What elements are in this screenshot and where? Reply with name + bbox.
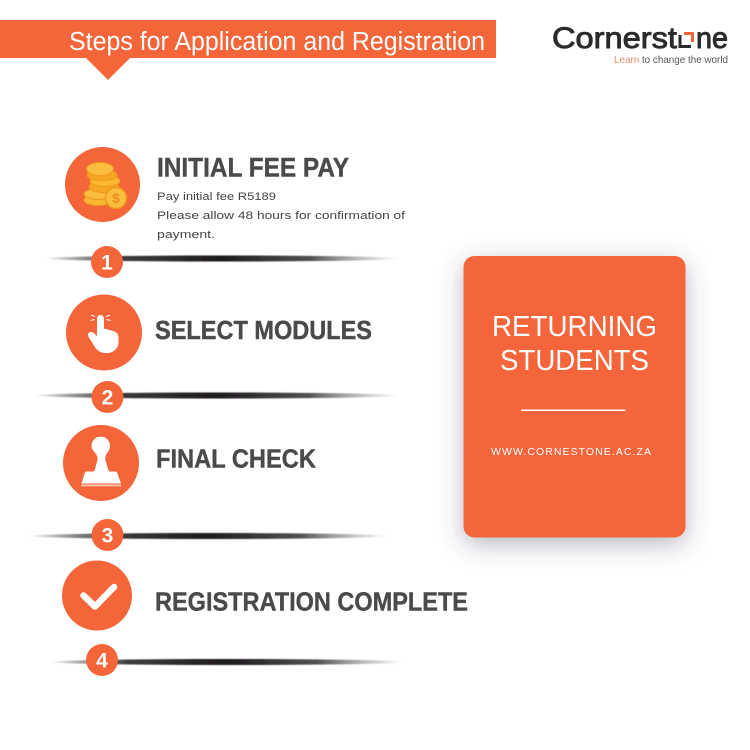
icon: gold coins	[65, 147, 140, 222]
divider with number 2: 2	[102, 386, 113, 410]
title banner: Steps for Application and Registration	[69, 28, 485, 56]
heading: FINAL CHECK	[156, 444, 316, 474]
divider with number 1: 1	[101, 252, 113, 274]
panel heading: RETURNING	[492, 311, 657, 343]
logo: Cornerstone: ne	[696, 22, 728, 55]
panel heading	[492, 311, 657, 377]
heading: SELECT MODULES	[155, 317, 372, 345]
icon: stamp	[63, 425, 139, 501]
divider with number 1	[44, 246, 400, 278]
heading: INITIAL FEE PAY	[157, 152, 349, 182]
logo: Cornerstone	[552, 22, 728, 66]
icon: tapping hand	[66, 294, 142, 370]
title banner	[0, 20, 496, 80]
body text: payment.	[157, 229, 215, 241]
heading: REGISTRATION COMPLETE	[155, 586, 468, 616]
icon: check mark	[62, 560, 132, 630]
panel heading: STUDENTS	[500, 345, 649, 377]
icon: gold coins: $	[112, 190, 120, 206]
step 2: select modules	[34, 294, 400, 413]
step 1: initial fee pay	[44, 147, 406, 278]
panel: returning students	[464, 256, 686, 538]
body text: Please allow 48 hours for confirmation of	[157, 210, 406, 222]
body text	[157, 191, 406, 241]
divider with number 3	[30, 519, 390, 551]
divider with number 2	[34, 381, 400, 413]
logo: Cornerstone: Cornerst	[552, 22, 678, 55]
step 4: registration complete	[50, 560, 468, 676]
website: WWW.CORNESTONE.AC.ZA	[491, 446, 651, 458]
step 3: final check	[30, 425, 390, 551]
divider with number 3: 3	[102, 524, 113, 548]
logo: Cornerstone: Learn to change the world	[614, 54, 728, 66]
divider with number 4	[50, 644, 406, 676]
divider with number 4: 4	[96, 650, 108, 672]
body text: Pay initial fee R5189	[157, 191, 276, 203]
